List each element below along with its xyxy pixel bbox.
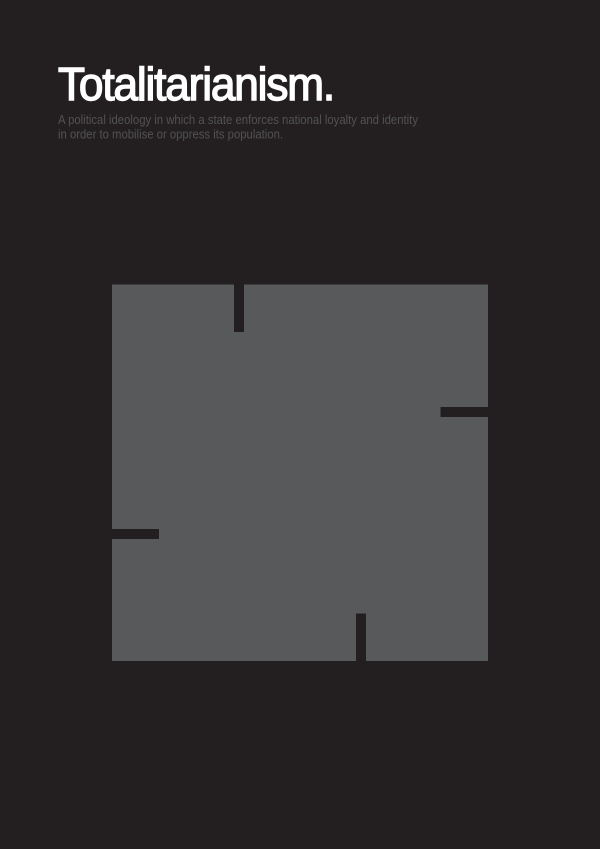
square with four notches: [112, 284, 488, 662]
title: Totalitarianism.: [58, 58, 334, 110]
bottom notch: [356, 614, 366, 662]
description text: [58, 113, 419, 142]
grey square: [112, 284, 488, 661]
left notch: [112, 529, 159, 539]
right notch: [440, 407, 488, 417]
description text: A political ideology in which a state enforces national loyalty and identity: [58, 113, 419, 127]
top notch: [234, 284, 244, 332]
description text: in order to mobilise or oppress its population.: [58, 128, 283, 142]
